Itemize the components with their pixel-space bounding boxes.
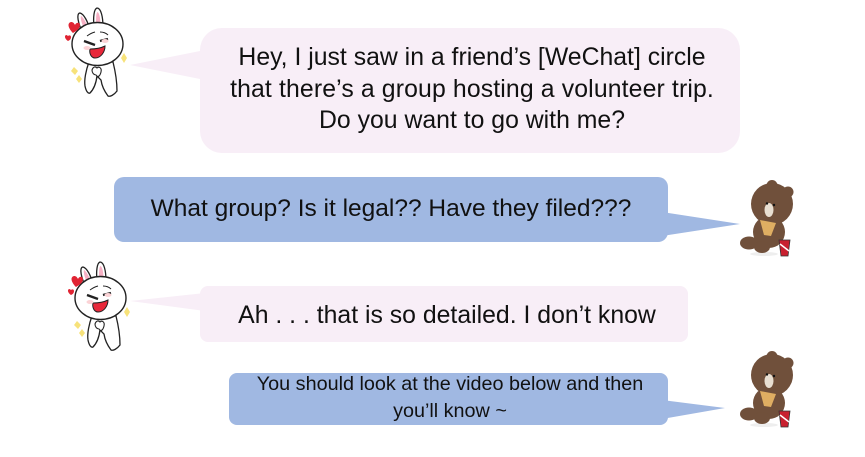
- panel: blue speech bubble top: [114, 177, 668, 242]
- message text: Ah . . . that is so detailed. I don’t know: [238, 302, 656, 329]
- panel: pink speech bubble top: [200, 28, 740, 153]
- message text: [230, 44, 714, 134]
- bubble tail: pink bottom: [130, 293, 205, 311]
- panel: pink speech bubble bottom: [200, 286, 688, 342]
- reply text: What group? Is it legal?? Have they filed???: [151, 195, 631, 222]
- icon: bunny bottom: [68, 262, 130, 350]
- bubble tail: blue top: [662, 212, 740, 236]
- reply text: You should look at the video below and then: [257, 373, 643, 395]
- bubble tail: pink top: [130, 50, 205, 80]
- icon: bunny top: [65, 8, 127, 96]
- message text: that there’s a group hosting a volunteer trip.: [230, 76, 714, 102]
- panel: blue speech bubble bottom: [229, 373, 668, 425]
- icon: bear bottom: [740, 351, 794, 427]
- reply text: [257, 373, 643, 422]
- icon: bear top: [740, 180, 794, 256]
- message text: Hey, I just saw in a friend’s [WeChat] circle: [238, 44, 706, 71]
- bubble tail: blue bottom: [662, 400, 725, 419]
- reply text: you’ll know ~: [393, 400, 507, 422]
- message text: Do you want to go with me?: [319, 107, 625, 134]
